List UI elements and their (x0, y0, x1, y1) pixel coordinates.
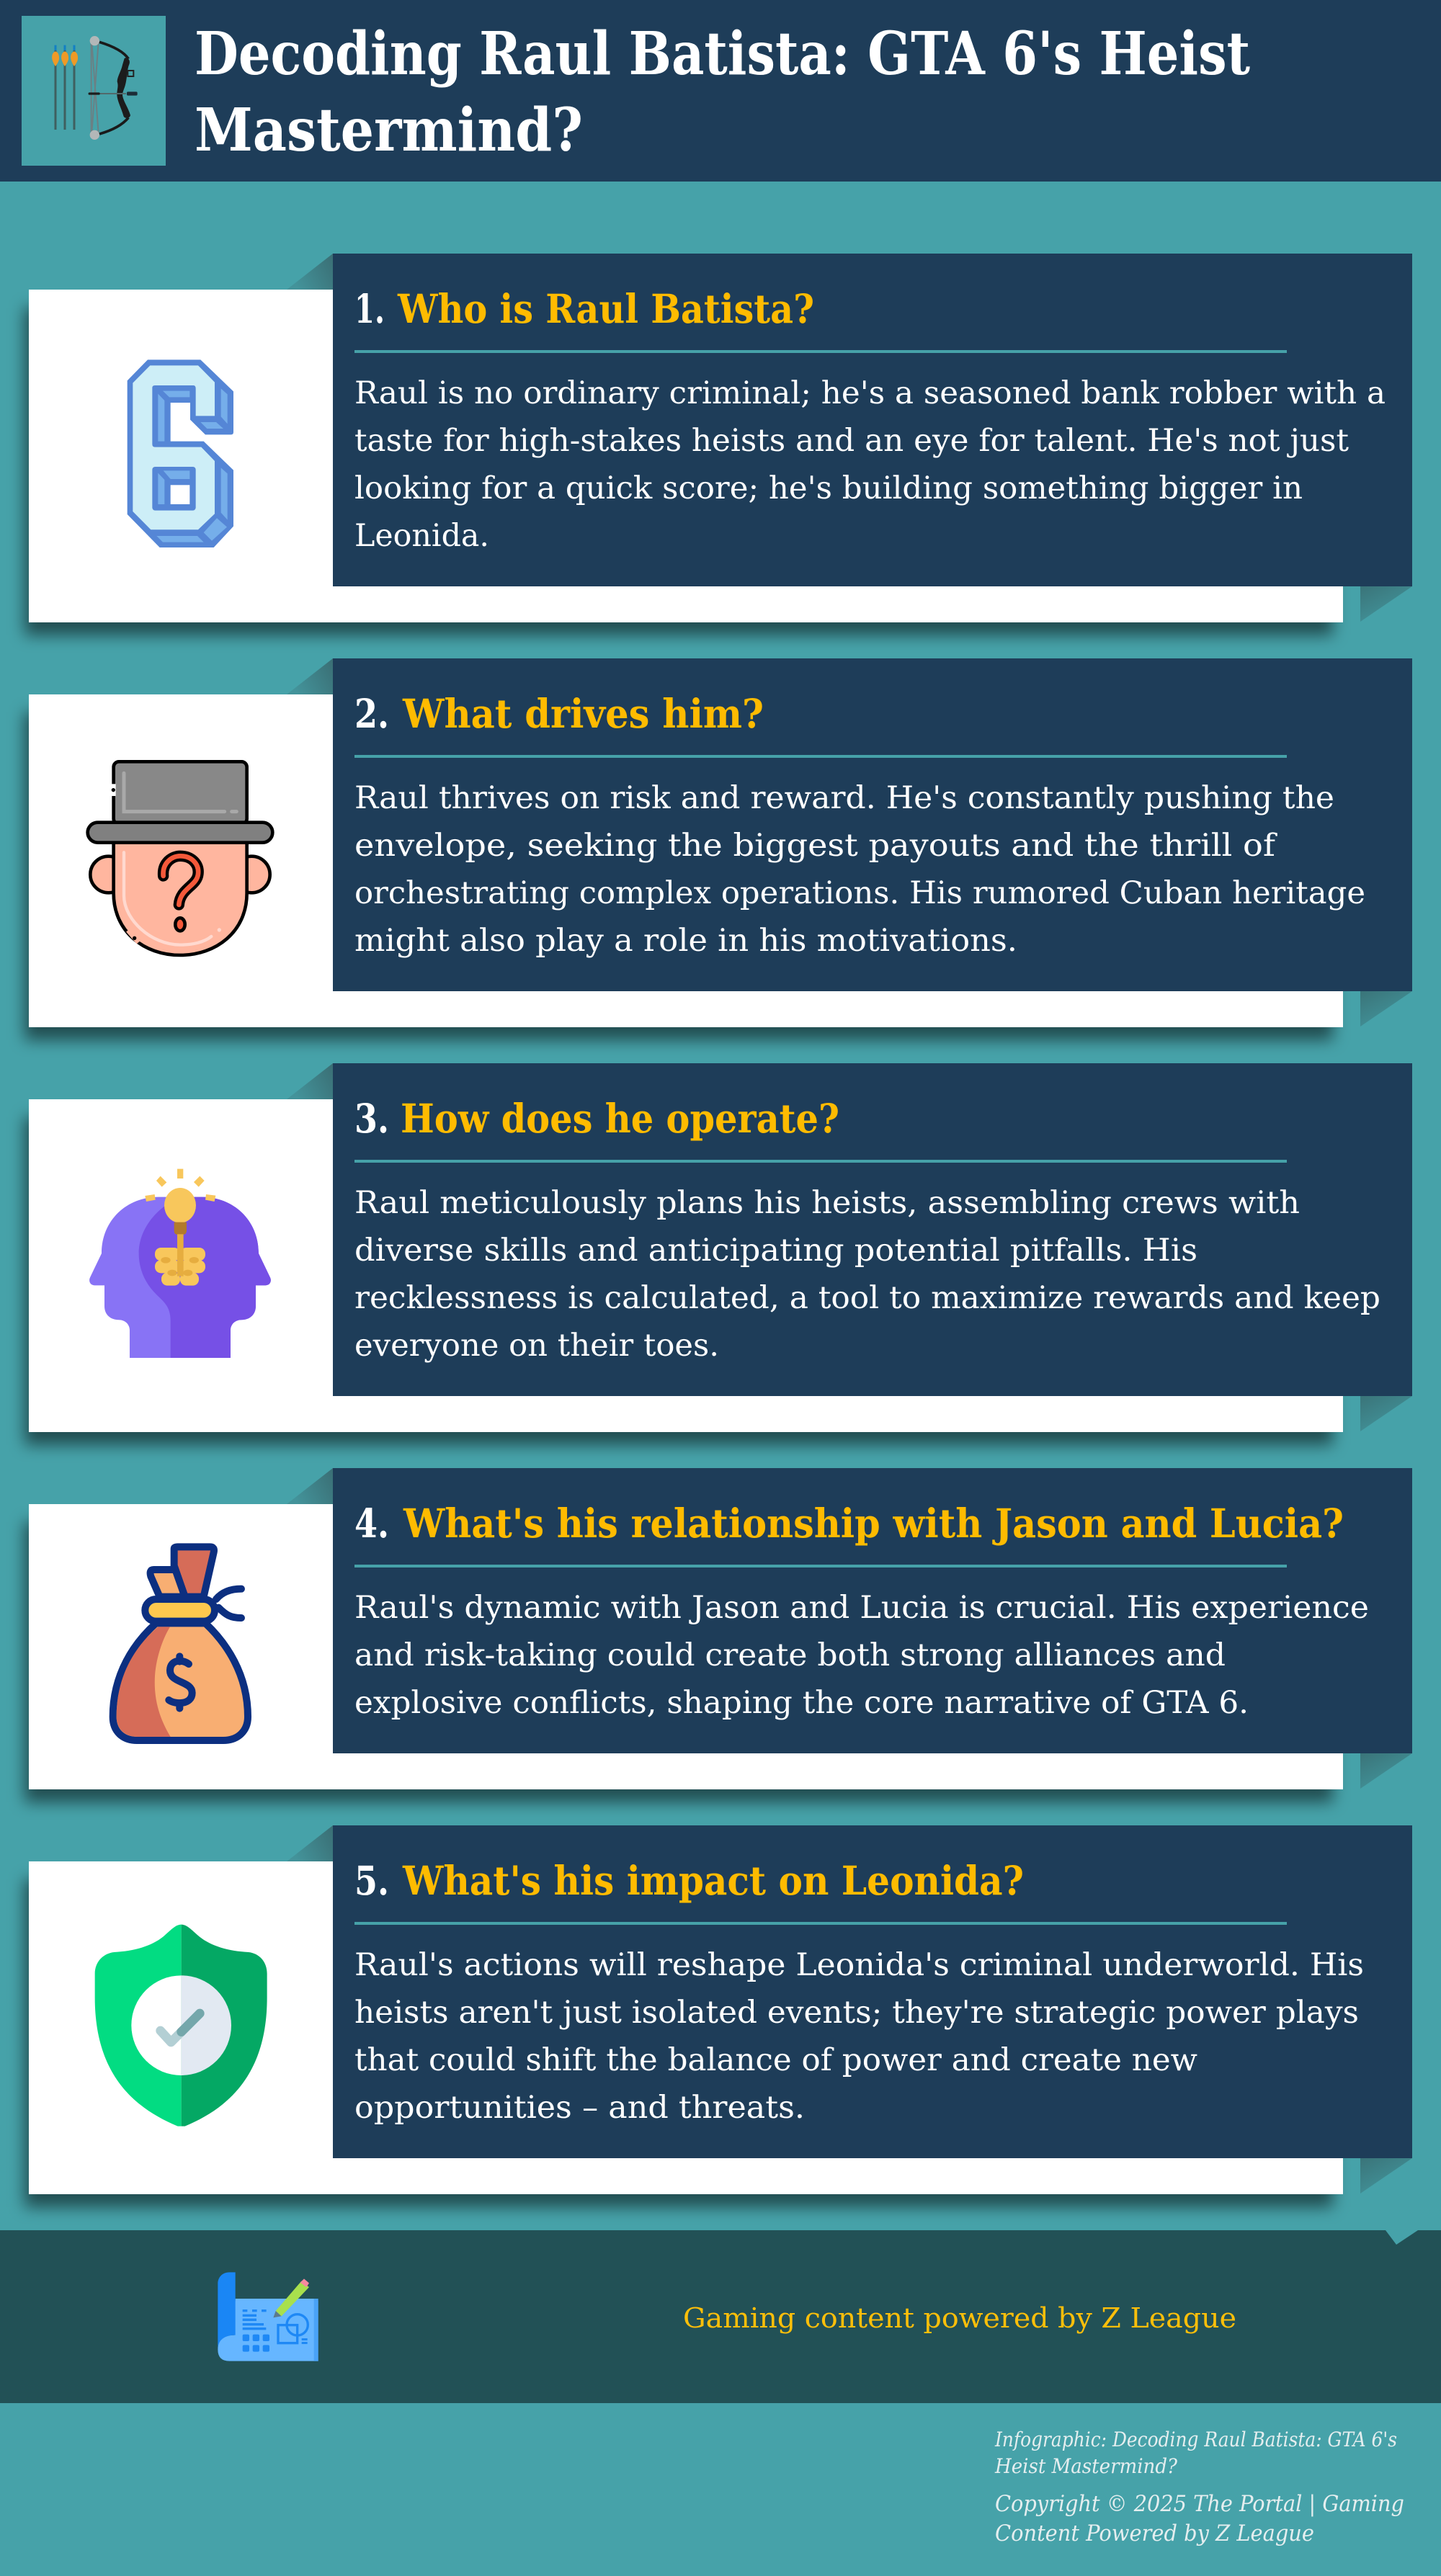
icon: shield with check (95, 1925, 267, 2126)
body text: Raul's actions will reshape Leonida's criminal underworld. His (354, 1947, 1364, 1983)
heading: 2. (354, 690, 389, 737)
title (195, 19, 1250, 165)
body text (354, 375, 1386, 554)
panel: 4 Relationship with Jason and Lucia (24, 1468, 1412, 1802)
body text: envelope, seeking the biggest payouts and the thrill of (354, 828, 1277, 864)
attribution text: Copyright © 2025 The Portal | Gaming (995, 2491, 1404, 2517)
body text: opportunities – and threats. (354, 2090, 805, 2126)
body text: recklessness is calculated, a tool to maximize rewards and keep (354, 1280, 1380, 1316)
body text: and risk-taking could create both strong alliances and (354, 1637, 1226, 1673)
body text (354, 1947, 1364, 2126)
title: Mastermind? (195, 96, 583, 165)
title: Decoding Raul Batista: GTA 6's Heist (195, 19, 1250, 89)
body text: Leonida. (354, 518, 489, 554)
heading: 5. (354, 1857, 389, 1904)
attribution text: Infographic: Decoding Raul Batista: GTA 6's (994, 2428, 1397, 2451)
body text: orchestrating complex operations. His rumored Cuban heritage (354, 875, 1365, 911)
body text: Raul's dynamic with Jason and Lucia is crucial. His experience (354, 1590, 1369, 1626)
heading: Who is Raul Batista? (397, 285, 814, 332)
attribution text: Content Powered by Z League (995, 2521, 1314, 2546)
attribution text (994, 2428, 1404, 2546)
body text: Raul meticulously plans his heists, assembling crews with (354, 1185, 1300, 1221)
icon: compound bow and arrows (22, 16, 166, 166)
icon: blueprint with pencil (218, 2272, 318, 2361)
panel: 3 How does he operate (24, 1063, 1412, 1445)
heading: 3. (354, 1095, 389, 1142)
heading: How does he operate? (401, 1095, 839, 1142)
heading: What's his relationship with Jason and Lucia? (403, 1500, 1344, 1547)
icon: money bag (113, 1547, 248, 1740)
heading: What's his impact on Leonida? (402, 1857, 1024, 1904)
body text: taste for high-stakes heists and an eye for talent. He's not just (354, 423, 1349, 459)
icon: faceless man with hat (88, 761, 272, 955)
attribution text: Heist Mastermind? (994, 2454, 1178, 2478)
body text: heists aren't just isolated events; they're strategic power plays (354, 1995, 1359, 2031)
body text: Raul is no ordinary criminal; he's a seasoned bank robber with a (354, 375, 1386, 411)
icon: two heads with light bulb (89, 1169, 271, 1358)
panel: 1 Who is Raul Batista (24, 254, 1412, 635)
body text: that could shift the balance of power and create new (354, 2042, 1197, 2078)
body text (354, 780, 1365, 959)
body text: Raul thrives on risk and reward. He's constantly pushing the (354, 780, 1334, 816)
body text: everyone on their toes. (354, 1328, 719, 1364)
body text (354, 1590, 1369, 1721)
heading: 1. (354, 285, 385, 332)
heading: 4. (354, 1500, 389, 1547)
panel: 2 What drives him (24, 658, 1412, 1040)
heading: What drives him? (402, 690, 764, 737)
body text: explosive conflicts, shaping the core narrative of GTA 6. (354, 1685, 1249, 1721)
body text: looking for a quick score; he's building something bigger in (354, 470, 1303, 506)
footer band (0, 2230, 1441, 2403)
body text: might also play a role in his motivations. (354, 923, 1017, 959)
footer text: Gaming content powered by Z League (683, 2302, 1236, 2334)
icon: number six (128, 359, 233, 547)
header band (0, 0, 1441, 182)
body text: diverse skills and anticipating potential pitfalls. His (354, 1233, 1197, 1269)
body text (354, 1185, 1380, 1364)
panel: 5 Impact on Leonida (24, 1825, 1412, 2207)
